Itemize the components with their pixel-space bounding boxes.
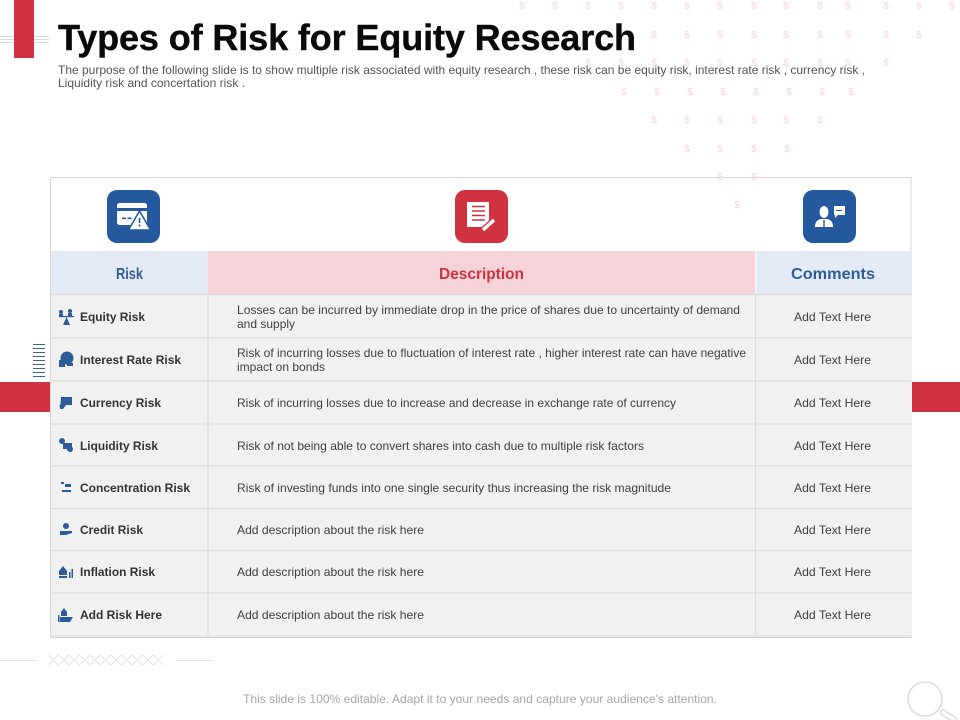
dollar sign pattern	[519, 1, 955, 155]
dollar sign pattern: $	[845, 58, 851, 69]
row: Interest Rate Risk	[59, 346, 871, 374]
row: Add Risk Here: Add Risk Here	[80, 608, 162, 622]
dollar sign pattern: $	[817, 115, 823, 126]
dollar sign pattern: $	[585, 1, 591, 12]
title: Types of Risk for Equity Research	[58, 17, 636, 58]
subtitle	[58, 63, 865, 90]
row: Currency Risk: Add Text Here	[794, 396, 871, 410]
dollar signs over panel: $	[717, 172, 723, 183]
row: Credit Risk: Add description about the risk here	[237, 523, 424, 537]
dollar sign pattern: $	[783, 115, 789, 126]
dollar sign pattern: $	[717, 144, 723, 155]
dollar sign pattern: $	[751, 144, 757, 155]
column header icon: document	[455, 190, 508, 243]
row: Credit Risk	[60, 523, 871, 537]
side stripe lines	[33, 344, 45, 376]
dollar sign pattern: $	[654, 87, 660, 98]
row: Add Risk Here: Add Text Here	[794, 608, 871, 622]
dollar sign pattern: $	[848, 87, 854, 98]
icon: hand with coin	[60, 523, 72, 535]
dollar sign pattern: $	[786, 87, 792, 98]
dollar sign pattern: $	[684, 144, 690, 155]
dollar sign pattern: $	[651, 58, 657, 69]
row: Inflation Risk: Add description about the risk here	[237, 565, 424, 579]
dollar sign pattern: $	[684, 30, 690, 41]
dollar sign pattern: $	[883, 58, 889, 69]
dollar sign pattern: $	[552, 1, 558, 12]
row: Concentration Risk: Risk of investing funds into one single security thus increasing the risk magnitude	[237, 481, 671, 495]
dollar signs over panel	[717, 172, 757, 211]
subtitle: Liquidity risk and concertation risk .	[58, 76, 245, 90]
row: Equity Risk: Equity Risk	[80, 310, 145, 324]
row: Inflation Risk: Inflation Risk	[80, 565, 155, 579]
column header icon: person with speech bubble	[803, 190, 856, 243]
row: Interest Rate Risk: Interest Rate Risk	[80, 353, 181, 367]
dollar sign pattern: $	[753, 87, 759, 98]
dollar sign pattern: $	[751, 115, 757, 126]
subtitle: The purpose of the following slide is to show multiple risk associated with equity research , these risk can be equity risk, interest rate risk , currency risk ,	[58, 63, 865, 77]
dollar sign pattern: $	[883, 30, 889, 41]
bottom-left decoration	[0, 655, 212, 665]
row: Add Risk Here	[58, 608, 871, 622]
dollar sign pattern: $	[817, 58, 823, 69]
header cell: Risk	[51, 251, 208, 294]
dollar sign pattern: $	[751, 30, 757, 41]
row: Equity Risk: Add Text Here	[794, 310, 871, 324]
dollar sign pattern: $	[684, 115, 690, 126]
dollar sign pattern: $	[519, 1, 525, 12]
row: Add Risk Here: Add description about the risk here	[237, 608, 424, 622]
row: Equity Risk	[59, 303, 871, 331]
dollar sign pattern: $	[621, 87, 627, 98]
dollar sign pattern: $	[720, 87, 726, 98]
row: Credit Risk: Add Text Here	[794, 523, 871, 537]
dollar sign pattern: $	[717, 1, 723, 12]
header cell: Risk: Risk	[116, 266, 143, 283]
dollar sign pattern: $	[618, 1, 624, 12]
row: Liquidity Risk: Liquidity Risk	[80, 439, 158, 453]
row: Interest Rate Risk: Risk of incurring losses due to fluctuation of interest rate , higher interest rate can have negative	[237, 346, 746, 360]
header cell: Comments	[756, 251, 912, 294]
row: Concentration Risk	[61, 481, 871, 495]
icon: globe with percent	[59, 352, 74, 367]
row: Credit Risk: Credit Risk	[80, 523, 143, 537]
dollar sign pattern: $	[783, 1, 789, 12]
row: Currency Risk	[60, 396, 871, 410]
header cell: Description: Description	[439, 266, 524, 283]
row: Inflation Risk	[59, 565, 871, 579]
dollar sign pattern: $	[684, 1, 690, 12]
dollar sign pattern: $	[783, 30, 789, 41]
icon: concentration	[61, 482, 71, 492]
header cell: Description	[208, 251, 755, 294]
table rows background	[51, 294, 912, 637]
row: Concentration Risk: Concentration Risk	[80, 481, 190, 495]
dollar sign pattern: $	[751, 58, 757, 69]
icon: hand with drop	[58, 608, 73, 622]
row: Currency Risk: Currency Risk	[80, 396, 161, 410]
dollar sign pattern: $	[717, 30, 723, 41]
row: Interest Rate Risk: Add Text Here	[794, 353, 871, 367]
dollar sign pattern: $	[845, 30, 851, 41]
dollar sign pattern: $	[684, 58, 690, 69]
row: Equity Risk: and supply	[237, 317, 295, 331]
row: Equity Risk: Losses can be incurred by immediate drop in the price of shares due to uncertainty of demand	[237, 303, 740, 317]
icon: currency note	[60, 397, 72, 409]
row: Liquidity Risk: Risk of not being able to convert shares into cash due to multiple risk factors	[237, 439, 644, 453]
dollar sign pattern: $	[651, 1, 657, 12]
dollar sign pattern: $	[651, 115, 657, 126]
dollar sign pattern: $	[817, 30, 823, 41]
dollar sign pattern: $	[916, 30, 922, 41]
column header icon: risk card	[107, 190, 160, 243]
row: Liquidity Risk	[59, 438, 871, 453]
dollar sign pattern: $	[651, 30, 657, 41]
dollar sign pattern: $	[783, 58, 789, 69]
icon: inflation bars	[59, 566, 73, 578]
dollar sign pattern: $	[717, 58, 723, 69]
row: Concentration Risk: Add Text Here	[794, 481, 871, 495]
dollar sign pattern: $	[687, 87, 693, 98]
dollar signs over panel: $	[734, 200, 740, 211]
dollar sign pattern: $	[717, 115, 723, 126]
dollar sign pattern: $	[618, 58, 624, 69]
header cell: Comments: Comments	[791, 266, 875, 283]
table panel	[50, 172, 912, 638]
dollar sign pattern: $	[784, 144, 790, 155]
dollar sign pattern: $	[845, 1, 851, 12]
side red bands	[0, 382, 960, 412]
dollar signs over panel: $	[751, 172, 757, 183]
dollar sign pattern: $	[916, 1, 922, 12]
dollar sign pattern: $	[585, 58, 591, 69]
dollar sign pattern: $	[817, 1, 823, 12]
icon: magnifying glass	[908, 682, 954, 720]
footer note: This slide is 100% editable. Adapt it to your needs and capture your audience's attention.	[243, 692, 717, 706]
row: Inflation Risk: Add Text Here	[794, 565, 871, 579]
row: Currency Risk: Risk of incurring losses due to increase and decrease in exchange rate of currency	[237, 396, 676, 410]
dollar sign pattern: $	[949, 1, 955, 12]
dollar sign pattern: $	[819, 87, 825, 98]
row: Interest Rate Risk: impact on bonds	[237, 360, 325, 374]
icon: balance scale	[59, 309, 74, 325]
header accent: red bar with lines	[0, 0, 49, 58]
dollar sign pattern: $	[751, 1, 757, 12]
row: Liquidity Risk: Add Text Here	[794, 439, 871, 453]
dollar sign pattern: $	[883, 1, 889, 12]
icon: liquidity	[59, 438, 73, 452]
